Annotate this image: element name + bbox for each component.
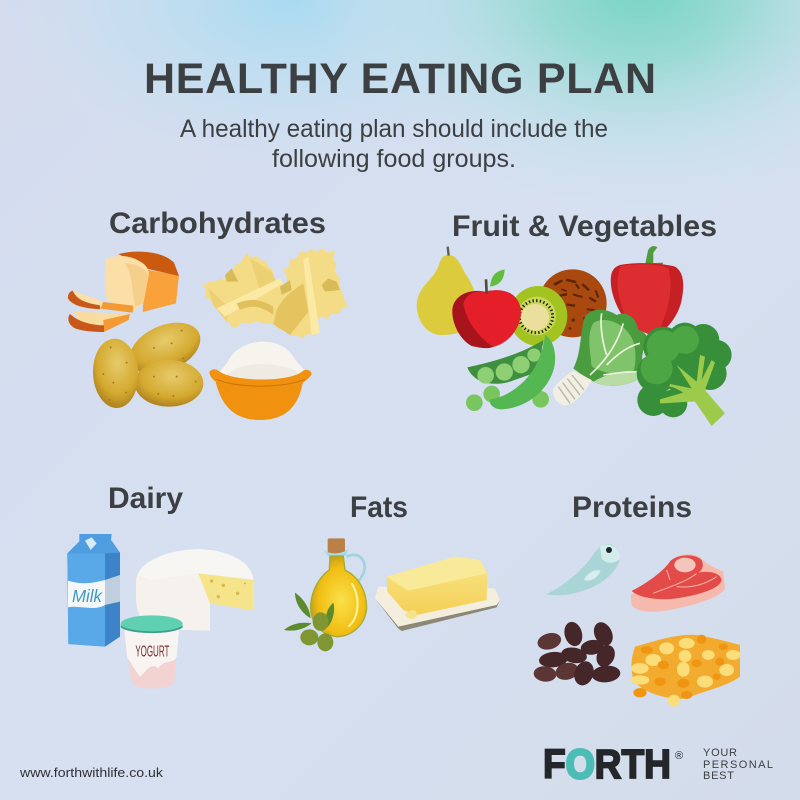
icon: milk carton bbox=[67, 534, 120, 647]
logo tagline bbox=[703, 747, 773, 782]
icon: pea pod bbox=[466, 335, 555, 411]
icon: fish bbox=[546, 544, 620, 595]
icon: olive oil bbox=[284, 538, 367, 651]
panel: fruit and vegetables bbox=[417, 210, 732, 426]
panel: dairy bbox=[67, 482, 253, 689]
icon: pasta bbox=[201, 248, 348, 338]
icon: butter bbox=[375, 557, 500, 631]
intro text: following food groups. bbox=[272, 145, 516, 173]
registered mark: ® bbox=[675, 750, 683, 762]
heading: proteins: Proteins bbox=[572, 491, 692, 524]
icon: yogurt bbox=[121, 615, 183, 689]
icon: rice bowl bbox=[209, 342, 312, 420]
icon: cheese bbox=[136, 549, 253, 631]
logo tagline: BEST bbox=[703, 770, 734, 782]
logo: forth bbox=[543, 741, 773, 787]
icon: coconut fruit bbox=[539, 269, 607, 337]
icon: milk carton: Milk bbox=[72, 586, 103, 606]
icon: lentils bbox=[631, 635, 741, 707]
heading: fats: Fats bbox=[350, 491, 408, 524]
logo tagline: PERSONAL bbox=[703, 759, 773, 771]
icon: bread bbox=[68, 252, 179, 332]
website url: www.forthwithlife.co.uk bbox=[19, 765, 164, 780]
icon: potatoes bbox=[91, 312, 208, 409]
panel: proteins bbox=[533, 491, 741, 707]
logo wordmark: FORTH bbox=[543, 741, 671, 787]
icon: kiwi bbox=[509, 286, 567, 346]
icon: steak bbox=[631, 554, 725, 612]
icon: broccoli bbox=[637, 323, 732, 426]
intro text bbox=[180, 115, 608, 173]
title: HEALTHY EATING PLAN bbox=[144, 55, 656, 103]
icon: pear bbox=[417, 247, 476, 335]
icon: yogurt: YOGURT bbox=[135, 644, 170, 661]
panel: carbohydrates bbox=[68, 207, 348, 420]
intro text: A healthy eating plan should include the bbox=[180, 115, 608, 143]
icon: bok choy bbox=[553, 310, 647, 406]
logo tagline: YOUR bbox=[703, 747, 737, 759]
heading: fruit and vegetables: Fruit & Vegetables bbox=[452, 210, 717, 243]
icon: beans bbox=[533, 619, 621, 688]
icon: pepper bbox=[611, 246, 683, 337]
heading: carbohydrates: Carbohydrates bbox=[109, 207, 326, 240]
heading: dairy: Dairy bbox=[108, 482, 183, 515]
panel: fats bbox=[284, 491, 500, 651]
icon: apple bbox=[452, 269, 521, 348]
